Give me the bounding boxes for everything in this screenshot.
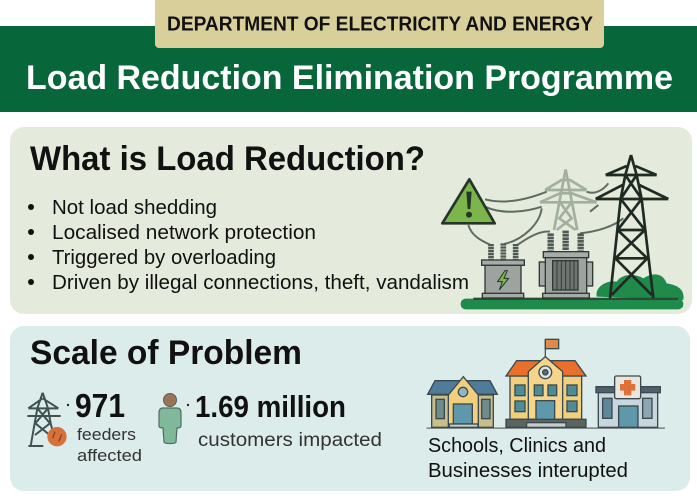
bullet list: Driven by illegal connections, theft, vandalism (52, 272, 469, 294)
stat: 971 feeders: 971 (75, 387, 125, 424)
panel: what is load reduction (10, 127, 692, 314)
clinic (596, 376, 660, 427)
caption: buildings (428, 435, 628, 482)
bullet list: Localised network protection (52, 222, 316, 244)
heading: what is load reduction: What is Load Reduction? (30, 140, 425, 178)
caption: buildings: Businesses interupted (428, 460, 628, 482)
bullet list: Not load shedding (52, 197, 217, 219)
stat: 971 feeders: affected (77, 446, 142, 465)
stat: 1.69 million customers: 1.69 million (195, 389, 346, 424)
illustration: power network with warning sign (442, 155, 684, 309)
stat: 971 feeders (67, 387, 142, 465)
ground and bush (461, 274, 684, 309)
left school (428, 377, 497, 427)
central building (506, 339, 586, 427)
icon: person (159, 394, 181, 444)
wires (468, 183, 623, 245)
background pylon (540, 169, 597, 230)
panel: scale of problem (10, 326, 690, 491)
title: Load Reduction Elimination Programme (26, 59, 673, 97)
small transformer (482, 243, 524, 298)
icon: pylon with fault badge (27, 393, 67, 446)
department tab (155, 0, 604, 48)
bullet list: Triggered by overloading (52, 247, 276, 269)
stat: 971 feeders: feeders (77, 425, 136, 444)
ground line (427, 427, 665, 429)
caption: buildings: Schools, Clinics and (428, 435, 606, 457)
stat: 1.69 million customers: customers impacted (198, 430, 382, 451)
stat: 1.69 million customers (187, 389, 382, 451)
illustration: school, town hall and clinic buildings (427, 339, 665, 429)
department tab: DEPARTMENT OF ELECTRICITY AND ENERGY (167, 14, 594, 36)
large transformer (539, 231, 593, 298)
warning triangle (442, 179, 495, 223)
foreground pylon (596, 155, 668, 298)
bullet list (28, 197, 469, 294)
header band (0, 0, 697, 112)
heading: scale of problem: Scale of Problem (30, 334, 302, 372)
